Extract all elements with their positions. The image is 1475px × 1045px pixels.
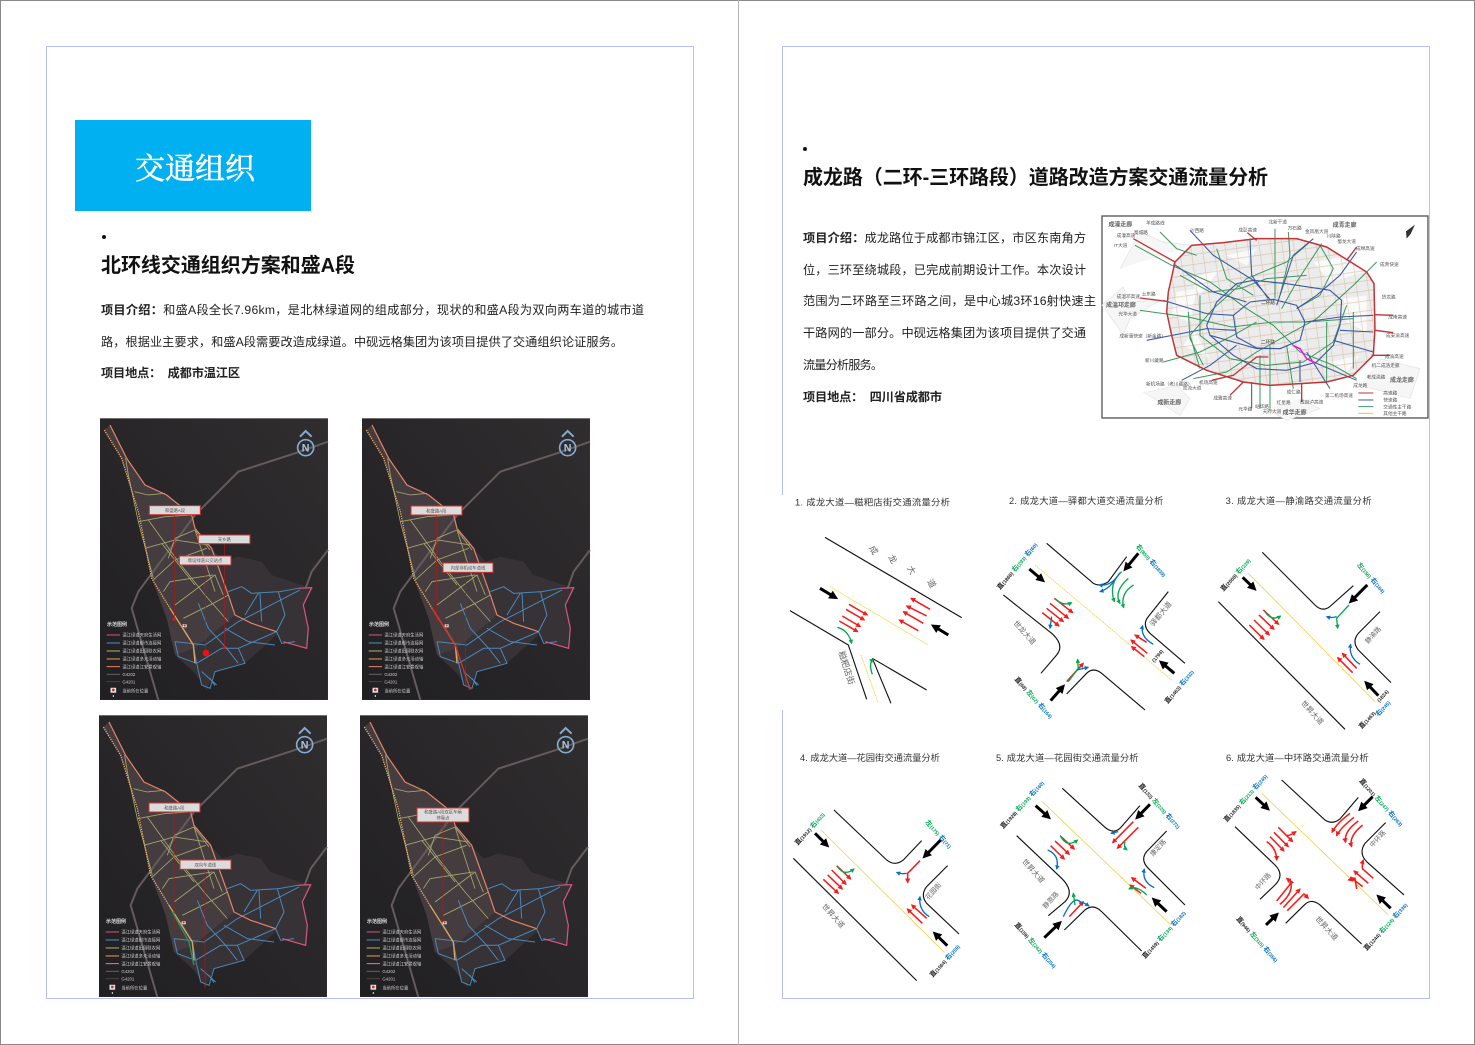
city road network map: 成灌走廊 <box>1108 220 1132 228</box>
city road network map: 新川藏路 <box>1145 357 1164 364</box>
diagram 4: 花园街: 世昇大道 <box>820 902 847 930</box>
city road network map: 成绵高速 <box>1356 245 1375 252</box>
diagram 6 title: 6. 成龙大道—中环路交通流量分析 <box>1226 752 1369 763</box>
city road network map: 第二机场高速 <box>1325 392 1353 399</box>
city road network map: 万石路 <box>1288 224 1302 231</box>
map 1: 和盛路A段 <box>165 507 186 514</box>
diagram 5 title: 5. 成龙大道—花园街交通流量分析 <box>996 752 1139 763</box>
diagram 2: 驿都大道: 世龙大道 <box>1011 619 1038 647</box>
section banner <box>75 120 311 211</box>
diagram 3: 静渝路: (1824) <box>1376 689 1391 704</box>
city road network map: 二环路 <box>1261 339 1275 346</box>
diagram 1: 糍粑店街: 成 <box>867 543 881 557</box>
city road network map: 成雅高速 <box>1213 394 1232 401</box>
left bullet <box>102 235 106 239</box>
map 2: 内部非机动车道线 <box>451 564 486 571</box>
city road network map: 元华路 <box>1238 406 1253 413</box>
map 3: 和盛路A段 <box>164 804 185 811</box>
diagram 3: 静渝路: 右(245) <box>1373 698 1392 718</box>
city road network map: 北新干道 <box>1268 219 1287 226</box>
city road network map: 机二成洛走廊 <box>1372 362 1400 369</box>
map 2 <box>362 418 590 700</box>
city road network map: 金凤凰大道 <box>1305 228 1329 235</box>
diagram 2: 驿都大道: 直(1463) 右(332) <box>1162 668 1196 705</box>
city road network map: 成温邛走廊 <box>1106 301 1136 309</box>
diagram 3: 静渝路: 世昇大道 <box>1299 699 1326 727</box>
map 1: 增设绿道公交站点 <box>188 557 223 564</box>
city road network map: 沙西路 <box>1190 227 1204 234</box>
city road network map: 光华大道 <box>1118 311 1137 318</box>
diagram 5: 静恩路: 世昇大道 <box>1020 857 1047 885</box>
map 1: 天乡路 <box>218 536 231 543</box>
diagram 2: 驿都大道: 右(850) 右(1839) <box>1134 542 1169 579</box>
city road network map: 站华路 <box>1255 403 1269 410</box>
city road network map: 其他主干路 <box>1383 410 1407 417</box>
section banner: 交通组织 <box>135 153 256 186</box>
right intro text: 项目地点： 四川省成都市 <box>803 389 942 404</box>
diagram 2: 驿都大道: 直(68) 左(62) 右(164) <box>1013 675 1055 720</box>
city road network map: 成仁路 <box>1287 389 1301 396</box>
diagram 2: 驿都大道: 驿都大道 <box>1148 599 1174 628</box>
diagram 5: 静恩路: 直(1459) 右(134) 右(182) <box>1140 908 1188 960</box>
right intro text <box>803 230 1096 404</box>
city road network map: IT大道 <box>1114 242 1128 249</box>
left intro text: 路，根据业主要求，和盛A段需要改造成绿道。中砚远格集团为该项目提供了交通组织论证服务。 <box>101 334 623 349</box>
city road network map: 成渝高速 <box>1385 353 1404 360</box>
left intro text <box>101 302 644 380</box>
city road network map: 天府大道 <box>1263 408 1282 415</box>
diagram 5: 静恩路: 康定路 <box>1148 837 1168 858</box>
city road network map: 成彭高速 <box>1238 226 1257 233</box>
right intro text: 流量分析服务。 <box>803 357 883 372</box>
city road network map: 高速路 <box>1383 390 1398 397</box>
map 4 <box>360 715 588 997</box>
city road network map: 蜀城路 <box>1134 229 1148 236</box>
diagram 4: 花园街 <box>792 752 962 981</box>
diagram 6: 中环路 <box>1221 752 1409 964</box>
city road network map: 成灌高速 <box>1117 232 1136 239</box>
map 4: 停靠点 <box>436 815 450 822</box>
diagram 2 title: 2. 成龙大道—驿都大道交通流量分析 <box>1009 495 1163 506</box>
city road network map: 川陕路 <box>1327 232 1341 239</box>
diagram 3: 静渝路 <box>1218 495 1392 731</box>
diagram 6: 中环路: 直(1244) 右(124) 右(336) <box>1361 900 1409 952</box>
city road network map: 机场高速 <box>1199 379 1218 386</box>
diagram 6: 中环路: 世昇大道 <box>1314 914 1340 943</box>
diagram 6: 中环路: 中环路 <box>1253 871 1273 892</box>
map 3 <box>99 715 327 997</box>
city road network map: 成自泸高速 <box>1300 399 1324 406</box>
diagram 3: 静渝路: 静渝路 <box>1363 624 1383 645</box>
city road network map: 双流大道 <box>1183 384 1202 391</box>
diagram 3 title: 3. 成龙大道—静渝路交通流量分析 <box>1226 495 1372 506</box>
city road network map: 成青快速 <box>1380 261 1399 268</box>
diagram 5: 静恩路: 直(1928) 右(193) 右(160) <box>998 778 1046 830</box>
city road network map: 成南高速 <box>1388 314 1407 321</box>
right page frame <box>782 46 1430 998</box>
city road network map: 快速路 <box>1383 397 1398 404</box>
city road network map: 交通性主干路 <box>1383 403 1412 410</box>
city road network map <box>1102 216 1428 420</box>
right intro text: 干路网的一部分。中砚远格集团为该项目提供了交通 <box>803 325 1086 340</box>
diagram 4: 花园街: 直(1564) 右(259) <box>927 942 962 979</box>
diagram 1: 糍粑店街: 大 <box>905 563 919 577</box>
diagram 5: 静恩路: 静恩路 <box>1040 889 1061 910</box>
diagram 4: 花园街: 花园街 <box>923 880 943 901</box>
diagram 5: 静恩路: 直(132) 左(225) 右(272) <box>1137 781 1183 831</box>
diagram 4: 花园街: 直(1912) 右(433) <box>792 810 827 847</box>
right heading: 成龙路（二环-三环路段）道路改造方案交通流量分析 <box>803 165 1268 189</box>
diagram 6: 中环路: 直(1201) 左(247) 右(263) <box>1357 776 1405 828</box>
city road network map: 蜀龙大道 <box>1337 238 1356 245</box>
diagram 1: 糍粑店街: 龙 <box>886 552 900 566</box>
diagram 1: 糍粑店街: 糍粑店街 <box>836 650 858 686</box>
right bullet <box>803 147 807 151</box>
diagram 5: 静恩路 <box>996 752 1188 970</box>
page divider <box>738 0 740 1045</box>
diagram 4 title: 4. 成龙大道—花园街交通流量分析 <box>800 752 940 763</box>
map 2: 和盛路A段 <box>426 507 447 514</box>
city road network map: 红星路 <box>1277 399 1291 406</box>
city road network map: 成新走廊 <box>1157 399 1181 407</box>
city road network map: 成华走廊 <box>1283 409 1307 417</box>
diagram 1: 糍粑店街: 道 <box>925 577 939 590</box>
city road network map: 成青走廊 <box>1333 221 1357 229</box>
diagram 6: 中环路: 直(946) 左(315) 右(356) <box>1235 914 1281 964</box>
left intro text: 项目地点： 成都市温江区 <box>101 365 240 380</box>
city road network map: 土东路 <box>1142 290 1156 297</box>
left intro text: 项目介绍：和盛A段全长7.96km，是北林绿道网的组成部分，现状的和盛A段为双向两车道的城市道 <box>101 302 644 317</box>
diagram 1: 糍粑店街 <box>790 496 962 703</box>
right intro text: 项目介绍：成龙路位于成都市锦江区，市区东南角方 <box>803 230 1086 245</box>
city road network map: 老成渝路 <box>1367 374 1386 381</box>
city road network map: 成龙走廊 <box>1390 376 1414 384</box>
city road network map: 成新蒲快速（新金路） <box>1119 332 1166 339</box>
diagram 5: 静恩路: 直(159) 左(262) 右(254) <box>1013 920 1059 970</box>
right intro text: 位，三环至绕城段，已完成前期设计工作。本次设计 <box>803 262 1086 277</box>
diagram 2: 驿都大道: (1794) <box>1151 649 1165 664</box>
left heading: 北环线交通组织方案和盛A段 <box>101 253 355 277</box>
map 1 <box>100 418 328 700</box>
diagram 6: 中环路: 直(1835) 右(213) 右(245) <box>1221 772 1269 824</box>
diagram 3: 静渝路: 左(156) 右(164) <box>1355 560 1388 595</box>
diagram 2: 驿都大道 <box>995 495 1196 720</box>
diagram 2: 驿都大道: 直(1868) 右(293) 右(60) <box>995 540 1039 591</box>
city road network map: 羊成路线 <box>1146 220 1165 227</box>
left page frame <box>46 46 694 998</box>
diagram 6: 中环路: 中环路 <box>1367 828 1388 849</box>
city road network map: 二环路 <box>1261 299 1275 306</box>
city road network map: 成温邛高速 <box>1117 293 1140 300</box>
map 3: 双向车道线 <box>195 861 217 868</box>
city road network map: 成龙路 <box>1353 382 1368 389</box>
diagram 1 title: 1. 成龙大道—糍粑店街交通流量分析 <box>795 496 950 507</box>
city road network map: 成安渝高速 <box>1386 332 1410 339</box>
right intro text: 范围为二环路至三环路之间，是中心城3环16射快速主 <box>803 293 1096 308</box>
city road network map: 货龙路 <box>1382 294 1396 301</box>
map 4: 和盛路A段双区车辆 <box>424 809 462 816</box>
diagram 3: 静渝路: 直(1463) <box>1356 709 1377 731</box>
city road network map: 新机场路（老川藏路） <box>1146 380 1193 387</box>
diagram 4: 花园街: 左(175) 右(71) <box>923 818 954 850</box>
diagram 3: 静渝路: 直(2008) 右(239) <box>1218 556 1253 593</box>
